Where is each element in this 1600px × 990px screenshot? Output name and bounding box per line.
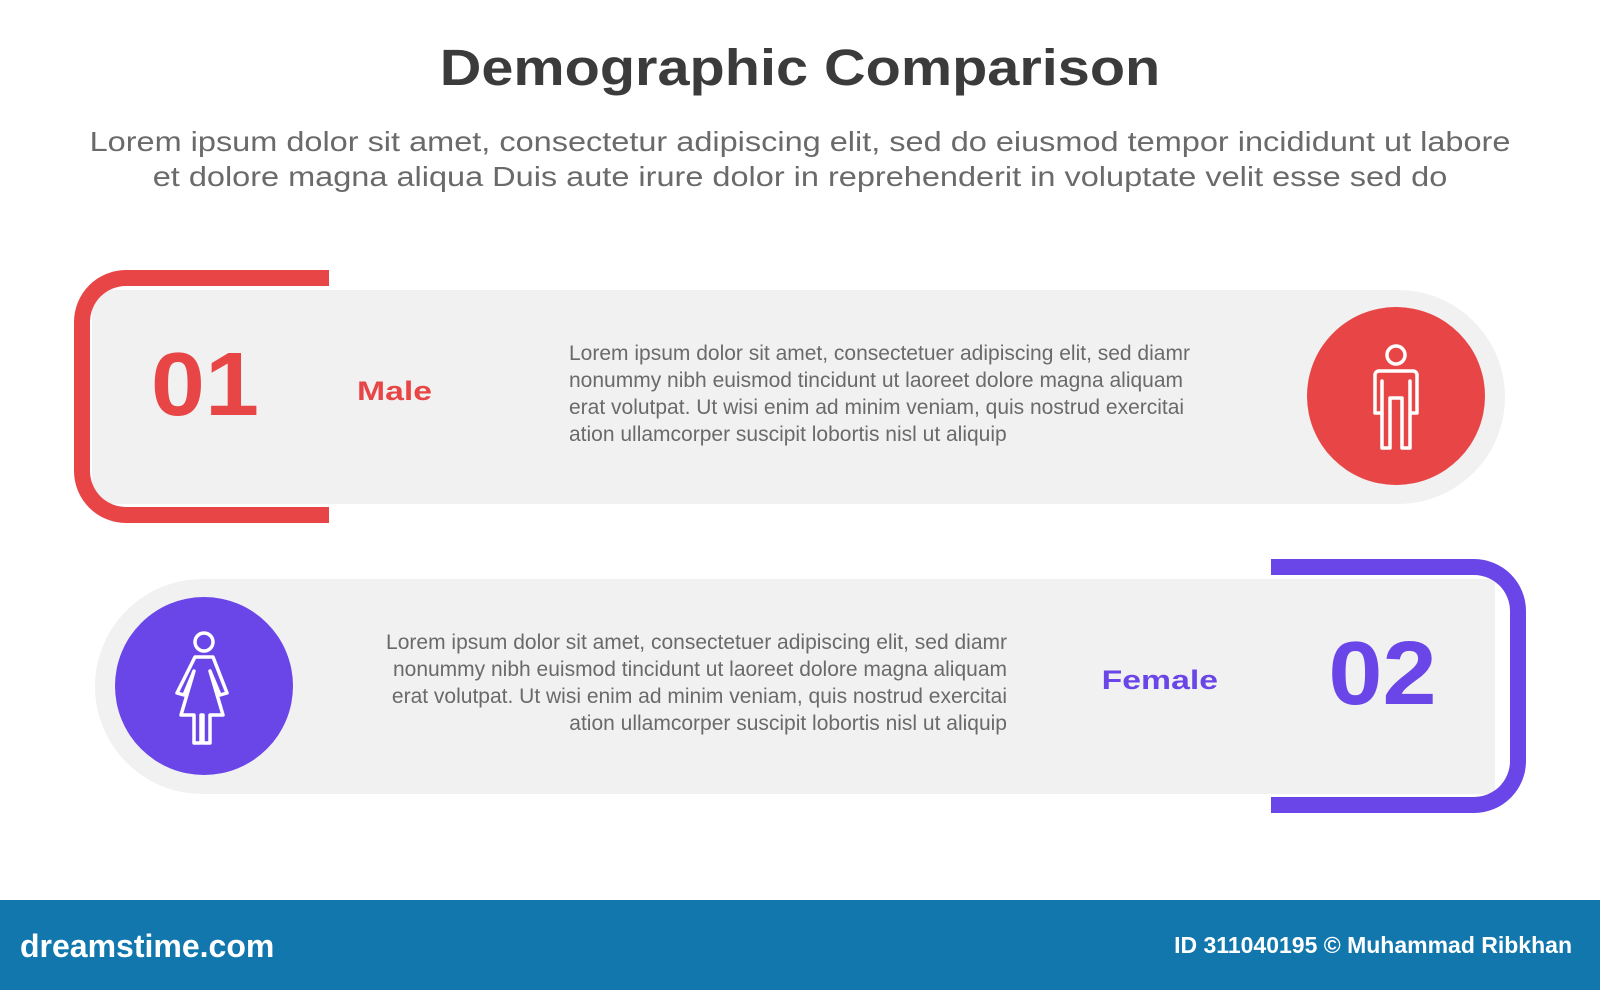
purple bracket [1271, 559, 1526, 813]
text block: Lorem ipsum dolor sit amet, consectetuer adipiscing elit, sed diamr [569, 342, 1190, 365]
text block [386, 631, 1007, 735]
footer credit: ID 311040195 © Muhammad Ribkhan [1174, 932, 1572, 958]
number 01: 01 [151, 335, 259, 435]
text block: nonummy nibh euismod tincidunt ut laoreet dolore magna aliquam [393, 658, 1007, 681]
title: Demographic Comparison [440, 39, 1160, 96]
text block: nonummy nibh euismod tincidunt ut laoreet dolore magna aliquam [569, 369, 1183, 392]
text block: ation ullamcorper suscipit lobortis nisl ut aliquip [569, 712, 1007, 735]
panel: male row [74, 270, 1505, 523]
subtitle: Lorem ipsum dolor sit amet, consectetur adipiscing elit, sed do eiusmod tempor incididunt ut labore [90, 126, 1510, 157]
pill background [95, 579, 1495, 794]
subtitle: et dolore magna aliqua Duis aute irure dolor in reprehenderit in voluptate velit esse sed do [153, 161, 1447, 192]
red bracket [74, 270, 329, 523]
text block: ation ullamcorper suscipit lobortis nisl ut aliquip [569, 423, 1007, 446]
label Male: Male [357, 376, 432, 406]
text block: Lorem ipsum dolor sit amet, consectetuer adipiscing elit, sed diamr [386, 631, 1007, 654]
footer [0, 900, 1600, 990]
icon: female [115, 597, 293, 775]
text block: erat volutpat. Ut wisi enim ad minim veniam, quis nostrud exercitai [569, 396, 1184, 419]
footer logo: dreamstime.com [20, 928, 274, 964]
number 02: 02 [1328, 624, 1437, 724]
label Female: Female [1102, 665, 1218, 695]
text block [569, 342, 1190, 446]
icon: male [1307, 307, 1485, 485]
subtitle [90, 126, 1510, 192]
text block: erat volutpat. Ut wisi enim ad minim veniam, quis nostrud exercitai [392, 685, 1007, 708]
panel: female row [95, 559, 1526, 813]
pill background [92, 290, 1505, 504]
